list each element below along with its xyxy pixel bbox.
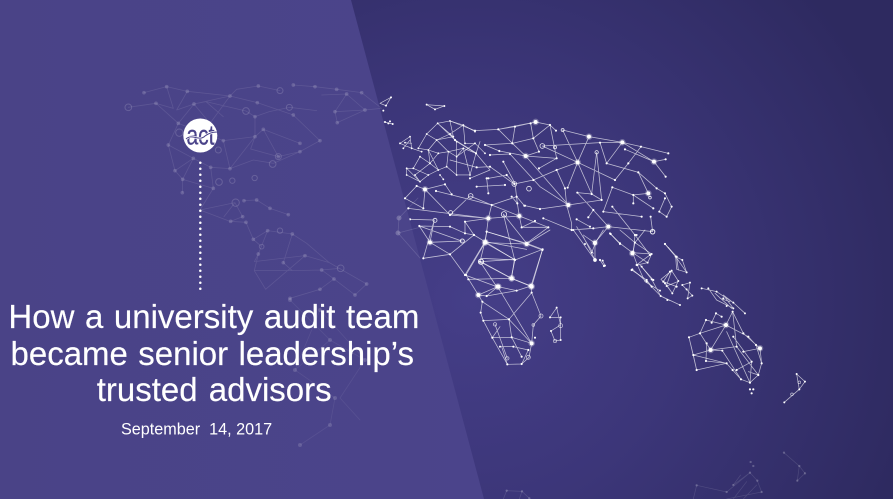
title: trusted advisors	[97, 371, 332, 408]
network: New Zealand	[784, 374, 805, 402]
title: How a university audit team	[8, 298, 419, 335]
panel: left diagonal	[0, 0, 484, 499]
title: became senior leadership’s	[10, 335, 414, 372]
map: South-East Asia, southern Africa and Oceania	[460, 230, 805, 402]
network: Europe	[400, 121, 485, 182]
dotted connector	[199, 163, 202, 289]
ghost reflection: bottom of the map	[503, 453, 805, 499]
map: Eurasia and Africa network	[400, 121, 678, 287]
ghost map: Americas	[125, 85, 382, 298]
network: Madagascar	[550, 308, 561, 341]
network: Philippines and Borneo	[661, 244, 692, 298]
network: New Guinea	[702, 288, 745, 313]
network: Sumatra and Java	[632, 265, 680, 305]
ghost map: Africa edge	[398, 198, 425, 258]
dots: small	[405, 123, 677, 287]
dots: halos	[425, 122, 654, 287]
title	[8, 298, 419, 408]
ring nodes	[433, 128, 655, 264]
network: Australia	[689, 312, 762, 383]
islands: North Atlantic fragments	[380, 97, 444, 124]
network: Asia	[400, 121, 678, 287]
network: Mediterranean	[450, 140, 517, 203]
icon: act logo: act	[186, 120, 215, 150]
network: southern Africa	[466, 230, 550, 364]
dots: large	[425, 122, 654, 287]
date: September 14, 2017	[121, 420, 272, 438]
network: Africa north	[405, 184, 548, 287]
ghost map: lower Americas	[290, 300, 365, 445]
network: Sri Lanka and Malaysia	[573, 230, 652, 266]
